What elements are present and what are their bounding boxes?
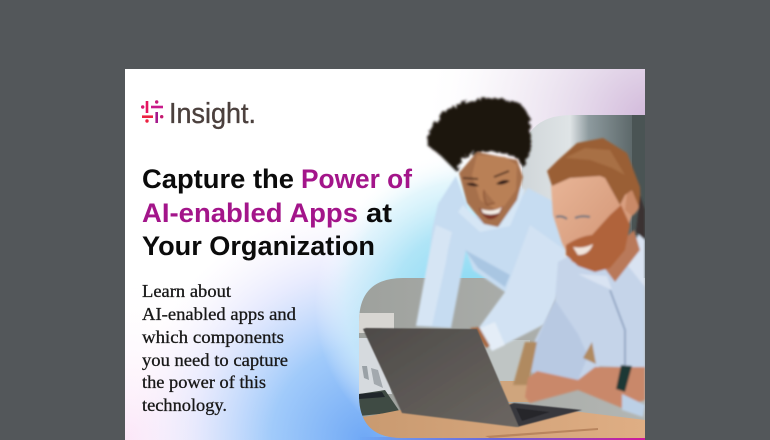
body text: which components [142,327,284,347]
man eyes [556,216,590,219]
title: Capture the [142,164,294,194]
logo wordmark: Insight. [169,98,256,130]
man beard [566,205,630,272]
photo: lower office background [359,278,645,438]
person: man [513,138,645,417]
body text: you need to capture [142,350,288,370]
title [142,164,413,261]
title: at [366,198,392,228]
laptop base [505,403,582,427]
laptop lid [363,328,519,427]
man ear [625,190,640,216]
woman smile [479,206,503,219]
icon: Insight logo mark [141,100,163,123]
paper on wall [359,313,394,333]
man cuff [622,394,645,417]
woman torso shirt [416,176,565,328]
woman collar [458,187,525,232]
man hair [547,138,641,212]
woman left arm shading [416,225,452,326]
documents [359,338,392,394]
man shirt [530,225,645,380]
body text: AI-enabled apps and [142,304,296,324]
notebook [359,390,400,416]
man neck [600,230,640,282]
desk [359,402,645,438]
man collar [581,236,645,290]
laptop [363,328,582,427]
body text [142,281,296,415]
title: Power of [301,164,413,194]
body text: technology. [142,395,227,415]
title: AI-enabled Apps [142,198,358,228]
man smile [573,244,593,255]
panel: gradient card background [125,69,645,440]
body text: Learn about [142,281,231,301]
man head [551,175,632,268]
man forearm [525,367,645,408]
body text: the power of this [142,372,266,392]
woman nose [484,190,495,205]
person: woman [416,97,565,351]
table back [500,381,530,402]
woman hair [427,97,531,172]
logo: Insight [141,98,256,130]
woman hand [470,327,490,348]
woman right sleeve [478,225,565,351]
photo: upper window background [520,115,645,290]
chair [513,342,596,385]
woman neck and face [459,152,523,227]
woman eyes [466,180,510,186]
man shoulder right [636,195,645,240]
title: Your Organization [142,231,375,261]
watch [616,365,632,392]
